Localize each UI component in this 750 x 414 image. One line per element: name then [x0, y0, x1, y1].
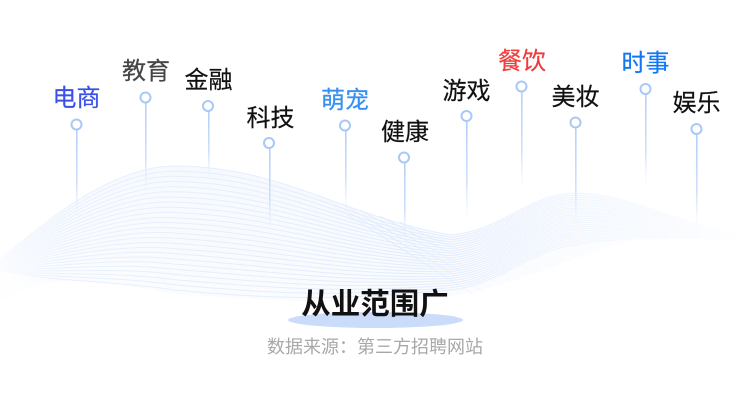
label: 娱乐: 娱乐 [672, 90, 720, 117]
label: 健康: 健康 [381, 119, 429, 146]
pin: 电商 [72, 120, 82, 218]
label: 科技: 科技 [246, 105, 294, 132]
label: 教育: 教育 [122, 58, 170, 84]
label: 游戏: 游戏 [442, 78, 490, 105]
title underline ellipse [288, 312, 463, 328]
label: 时事: 时事 [622, 50, 670, 77]
pin: 游戏 [462, 111, 472, 220]
pin: 美妆 [570, 118, 580, 226]
label: 电商: 电商 [52, 84, 100, 112]
pin: 娱乐 [692, 124, 702, 229]
title: 从业范围广 [301, 288, 449, 320]
pin: 餐饮 [516, 82, 526, 190]
label: 美妆: 美妆 [552, 84, 600, 111]
label: 金融: 金融 [184, 66, 232, 94]
source note: 数据来源：第三方招聘网站 [267, 337, 483, 357]
pin: 萌宠 [340, 120, 350, 211]
pin: 健康 [399, 152, 409, 241]
pin: 科技 [264, 138, 274, 233]
label: 餐饮: 餐饮 [498, 48, 546, 75]
pin: 时事 [640, 84, 650, 187]
label: 萌宠: 萌宠 [321, 87, 369, 114]
wave mesh background [14, 166, 652, 298]
pin: 教育 [140, 92, 150, 195]
pin: 金融 [203, 101, 213, 179]
